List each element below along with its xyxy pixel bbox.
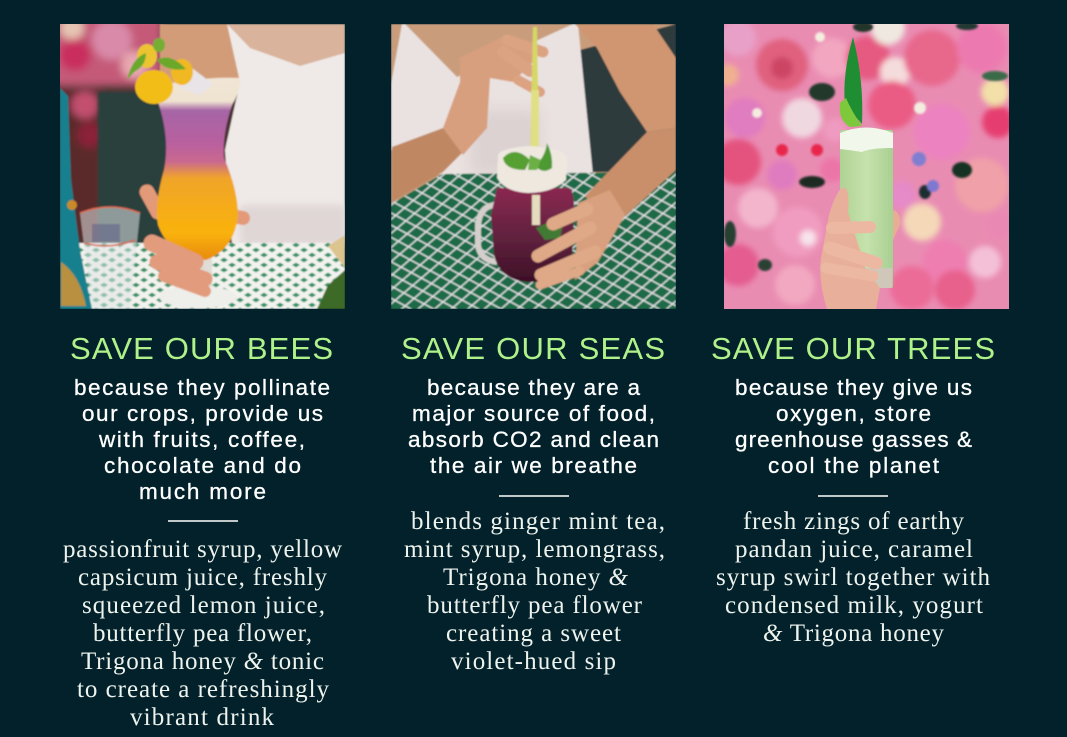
text: bees drink ingredients: capsicum juice, freshly [78,564,328,591]
heading: bees: SAVE OUR BEES [70,331,333,366]
text: why seas matter: because they are a [427,375,640,400]
text: bees drink ingredients [63,536,342,731]
text: trees drink ingredients: fresh zings of earthy [743,508,964,535]
raised hand [443,35,537,155]
text: bees drink ingredients: butterfly pea flower, [93,620,312,647]
text: why trees matter: greenhouse gasses & [735,427,972,452]
camisole [391,24,593,175]
column: save our seas [401,331,665,675]
text: bees drink ingredients: Trigona honey & tonic [81,648,324,675]
small glass [80,206,140,309]
text: seas drink ingredients: Trigona honey & [443,564,629,591]
hand [152,243,205,291]
text: bees drink ingredients: passionfruit syrup, yellow [63,536,342,563]
text: why bees matter: with fruits, coffee, [98,427,305,452]
stem and foot [199,258,212,290]
text: why bees matter: our crops, provide us [82,401,323,426]
fingers behind glass [147,192,158,212]
photo: pandan drink raised against a flower wall [715,11,1014,310]
text: trees drink ingredients: & Trigona honey [763,620,944,647]
text: why bees matter [74,375,330,504]
text: why seas matter [408,375,659,478]
table [60,243,345,309]
left forearm [392,128,467,202]
text: seas drink ingredients: creating a sweet [446,620,621,647]
text: trees drink ingredients: condensed milk, yogurt [725,592,983,619]
cushion [580,24,676,172]
text: why trees matter: oxygen, store [776,401,931,426]
text: why bees matter: chocolate and do [104,453,301,478]
text: trees drink ingredients: syrup swirl together with [716,564,990,591]
text: bees drink ingredients: vibrant drink [130,704,274,731]
bottle [60,88,92,309]
text: why trees matter: cool the planet [768,453,940,478]
text: trees drink ingredients [716,508,990,647]
straw [530,27,539,155]
heading: trees: SAVE OUR TREES [711,331,995,366]
text: seas drink ingredients: blends ginger mint tea, [411,508,665,535]
text: why bees matter: much more [139,479,266,504]
heading: seas: SAVE OUR SEAS [401,331,665,366]
text: why seas matter: major source of food, [412,401,655,426]
gripping hand [575,190,625,280]
text: seas drink ingredients: mint syrup, lemongrass, [404,536,665,563]
text: why seas matter: absorb CO2 and clean [408,427,659,452]
leaves [844,37,862,124]
text: trees drink ingredients: pandan juice, caramel [735,536,973,563]
garnish [171,59,193,85]
hurricane glass [155,78,241,260]
cushion [98,92,168,244]
table [391,172,676,309]
hand [820,188,880,309]
column: save our trees [711,331,995,647]
arm and chest [171,24,345,84]
text: seas drink ingredients: butterfly pea flower [427,592,643,619]
photo: passionfruit drink held in front of white top [50,14,345,309]
photo: violet drink in mason jar on checked table [391,24,676,309]
tall glass [840,130,893,288]
text: why seas matter: the air we breathe [430,453,637,478]
text: bees drink ingredients: to create a refreshingly [77,676,330,703]
text: why trees matter: because they give us [735,375,972,400]
jar [491,188,574,282]
text: why bees matter: because they pollinate [74,375,330,400]
column: save our bees [63,331,342,731]
text: bees drink ingredients: squeezed lemon juice, [82,592,325,619]
text: seas drink ingredients [404,508,665,675]
right arm [575,24,676,132]
jar handle [478,205,497,262]
white top [225,24,345,245]
mint [503,152,530,170]
text: why trees matter [735,375,972,478]
text: seas drink ingredients: violet-hued sip [451,648,616,675]
right forearm [584,128,676,218]
